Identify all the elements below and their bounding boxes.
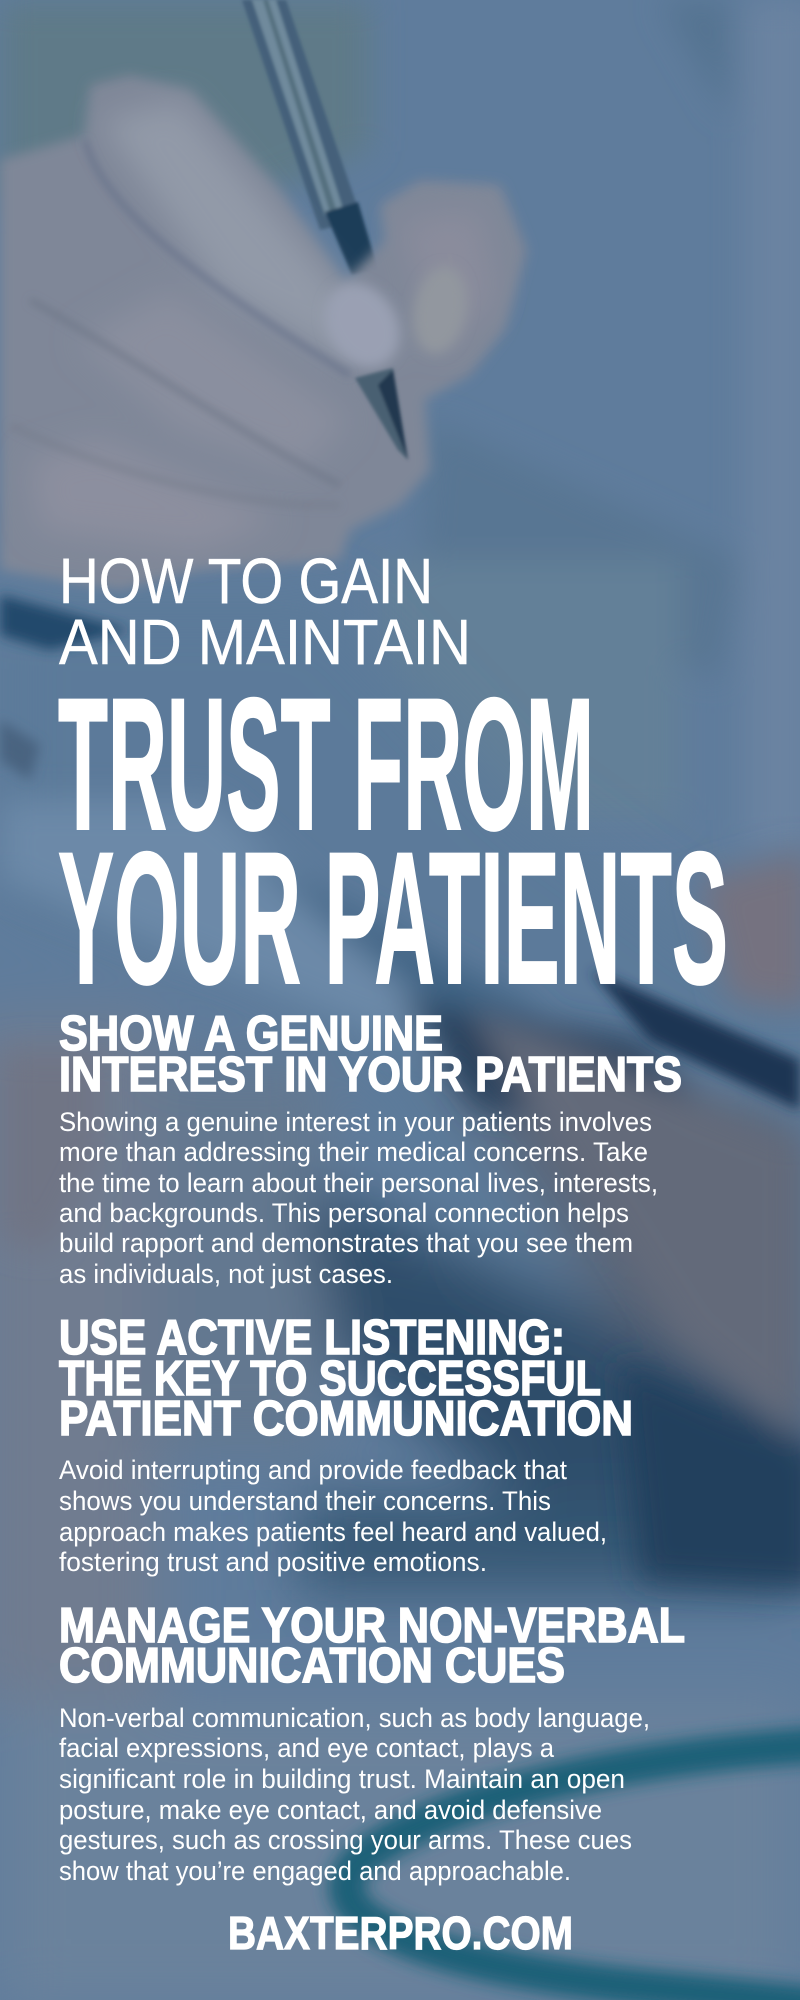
section 2 body: Avoid interrupting and provide feedback that: [59, 1455, 567, 1485]
section 1 body: as individuals, not just cases.: [59, 1259, 393, 1289]
section 3 body: show that you’re engaged and approachable.: [59, 1856, 571, 1886]
section 2 body: approach makes patients feel heard and valued,: [59, 1517, 607, 1547]
section 3 body: posture, make eye contact, and avoid defensive: [59, 1795, 602, 1825]
section 1 heading: SHOW A GENUINE: [59, 1007, 443, 1061]
footer website: BAXTERPRO.COM: [228, 1907, 573, 1959]
title: trust from your patients: [58, 659, 728, 1023]
section 1 heading: INTEREST IN YOUR PATIENTS: [59, 1048, 682, 1102]
section 2 body: [59, 1455, 607, 1577]
section 1 body: [59, 1107, 658, 1289]
section 1 body: the time to learn about their personal lives, interests,: [59, 1168, 658, 1198]
section 1 body: build rapport and demonstrates that you see them: [59, 1228, 633, 1258]
section 1 body: Showing a genuine interest in your patients involves: [59, 1107, 652, 1137]
title: how to gain and maintain: HOW TO GAIN: [59, 545, 433, 617]
title: how to gain and maintain: [59, 545, 471, 678]
section 1 heading: [59, 1007, 682, 1102]
pen: [242, 0, 378, 275]
title: how to gain and maintain: AND MAINTAIN: [59, 606, 471, 678]
section 3 body: facial expressions, and eye contact, plays a: [59, 1733, 555, 1763]
finger shading: [30, 100, 495, 550]
section 3 body: significant role in building trust. Maintain an open: [59, 1764, 625, 1794]
section 2 heading: THE KEY TO SUCCESSFUL: [59, 1352, 601, 1406]
section 2 body: shows you understand their concerns. This: [59, 1486, 551, 1516]
section 3 body: [59, 1703, 650, 1886]
teal stethoscope tube: [347, 1745, 800, 2000]
section 1: [59, 1007, 682, 1289]
section 2: [59, 1311, 633, 1577]
section 3: [59, 1599, 685, 1886]
section 3 heading: MANAGE YOUR NON-VERBAL: [59, 1599, 685, 1653]
section 1 body: more than addressing their medical concerns. Take: [59, 1137, 648, 1167]
pen tip: [355, 368, 408, 460]
section 3 body: Non-verbal communication, such as body language,: [59, 1703, 650, 1733]
section 2 heading: PATIENT COMMUNICATION: [59, 1392, 633, 1446]
section 3 heading: [59, 1599, 685, 1693]
section 3 heading: COMMUNICATION CUES: [59, 1639, 565, 1693]
section 2 heading: USE ACTIVE LISTENING:: [59, 1311, 565, 1365]
hand holding pen: [0, 75, 527, 590]
section 3 body: gestures, such as crossing your arms. These cues: [59, 1825, 632, 1855]
section 1 body: and backgrounds. This personal connection helps: [59, 1198, 629, 1228]
section 2 body: fostering trust and positive emotions.: [59, 1547, 487, 1577]
dark clipboard edge: [0, 595, 800, 1110]
section 2 heading: [59, 1311, 633, 1446]
